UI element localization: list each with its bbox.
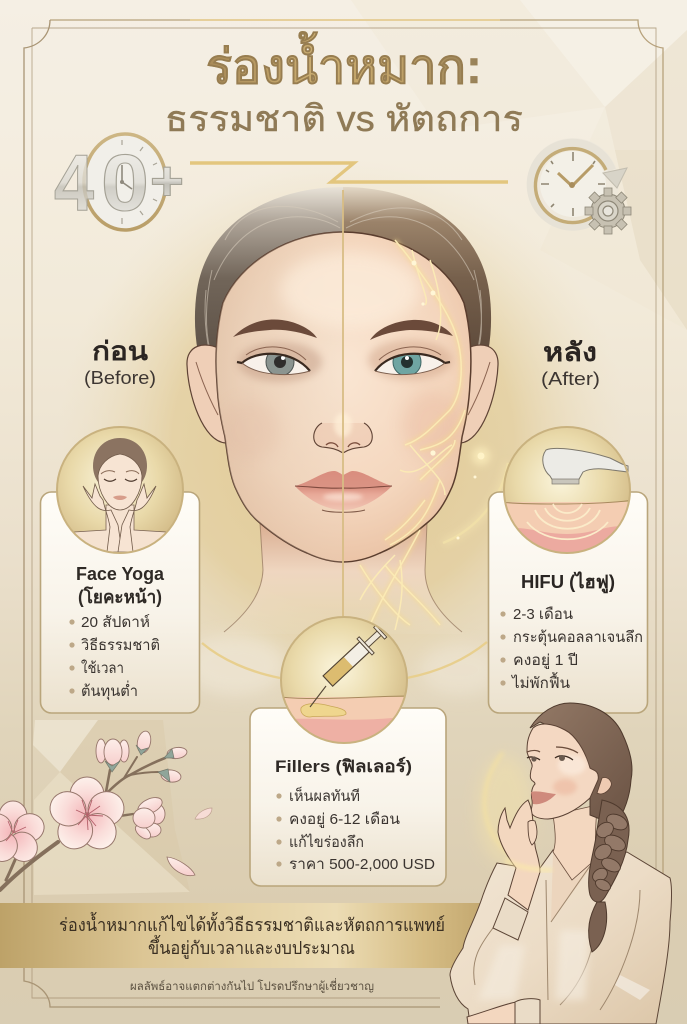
ears — [187, 345, 498, 443]
cherry blossom branch — [0, 730, 212, 890]
HIFU bullets: ไม่พักฟื้น — [511, 672, 570, 692]
eyebrows — [233, 320, 453, 340]
neck — [222, 520, 464, 634]
panel: Fillers — [250, 617, 446, 886]
cuff — [493, 898, 528, 940]
HIFU heading: HIFU (ไฮฟู) — [521, 571, 615, 594]
blossom large — [46, 777, 128, 856]
HIFU bullets: กระตุ้นคอลลาเจนลึก — [513, 629, 643, 647]
after label: (After) — [541, 369, 600, 389]
after label — [541, 337, 600, 389]
Face Yoga bullets: 20 สัปดาห์ — [81, 614, 150, 631]
icon: face yoga illustration — [57, 427, 183, 556]
portrait: split face — [187, 187, 498, 634]
icon: 40+ clock: + — [150, 149, 184, 212]
hair back — [195, 187, 343, 405]
HIFU bullets: คงอยู่ 1 ปี — [513, 652, 578, 669]
HIFU bullets: 2-3 เดือน — [513, 606, 573, 623]
after label: หลัง — [543, 337, 597, 367]
icon: clock with gear — [527, 138, 631, 234]
title line 1: ร่องน้ำหมาก: — [206, 31, 482, 94]
Fillers bullets — [276, 786, 435, 873]
golden collagen threads — [360, 240, 465, 630]
Fillers heading: Fillers (ฟิลเลอร์) — [275, 756, 412, 776]
face — [216, 232, 471, 562]
center divider — [342, 190, 344, 625]
connector arcs to Fillers — [202, 642, 487, 678]
falling petals — [195, 808, 212, 819]
Face Yoga heading: Face Yoga — [76, 564, 165, 584]
Face Yoga bullets — [69, 614, 160, 701]
panel: Face Yoga — [40, 427, 200, 713]
footer band — [0, 903, 480, 968]
neck — [553, 805, 597, 880]
title — [165, 31, 523, 139]
glow on collar — [505, 860, 552, 870]
HIFU bullets — [500, 606, 643, 692]
hair and braid — [530, 703, 632, 825]
icon: HIFU device on skin — [500, 427, 634, 560]
icon: 40+ clock: 4 — [54, 138, 94, 227]
Face Yoga bullets: ต้นทุนต่ำ — [81, 680, 138, 701]
icon: syringe on skin — [280, 617, 410, 750]
Fillers bullets: ราคา 500-2,000 USD — [289, 856, 435, 873]
banner text: ร่องน้ำหมากแก้ไขได้ทั้งวิธีธรรมชาติและหัตถการแพทย์ — [59, 912, 445, 935]
hands — [498, 800, 540, 910]
Face Yoga bullets: ใช้เวลา — [81, 659, 124, 677]
glow crescent — [477, 755, 533, 865]
panel: HIFU — [488, 427, 648, 713]
before label — [84, 336, 156, 388]
shirt — [450, 850, 672, 1024]
title line 2: ธรรมชาติ vs หัตถการ — [165, 98, 523, 139]
before label: (Before) — [84, 368, 156, 388]
Fillers bullets: เห็นผลทันที — [289, 786, 360, 805]
face — [527, 724, 598, 819]
before label: ก่อน — [92, 336, 148, 366]
Face Yoga bullets: วิธีธรรมชาติ — [80, 637, 160, 654]
blossom left — [0, 801, 48, 867]
Fillers bullets: แก้ไขร่องลึก — [289, 833, 364, 851]
footer band: ขึ้นอยู่กับเวลาและงบประมาณ — [148, 935, 355, 959]
panel: Face Yoga: (โยคะหน้า) — [78, 586, 162, 607]
illustration: woman with braid — [450, 703, 672, 1024]
buds — [96, 730, 188, 783]
blossom side — [133, 794, 165, 842]
Fillers bullets: คงอยู่ 6-12 เดือน — [289, 811, 400, 828]
divider: gold zigzag — [190, 163, 508, 182]
footnote: ผลลัพธ์อาจแตกต่างกันไป โปรดปรึกษาผู้เชี่ยวชาญ — [130, 978, 374, 993]
gold arc around face — [443, 463, 508, 543]
icon: 40+ clock: 0 — [101, 138, 149, 227]
icon: 40+ clock — [54, 134, 184, 230]
nose — [314, 423, 372, 453]
eyes — [237, 347, 450, 376]
lips — [295, 471, 392, 510]
